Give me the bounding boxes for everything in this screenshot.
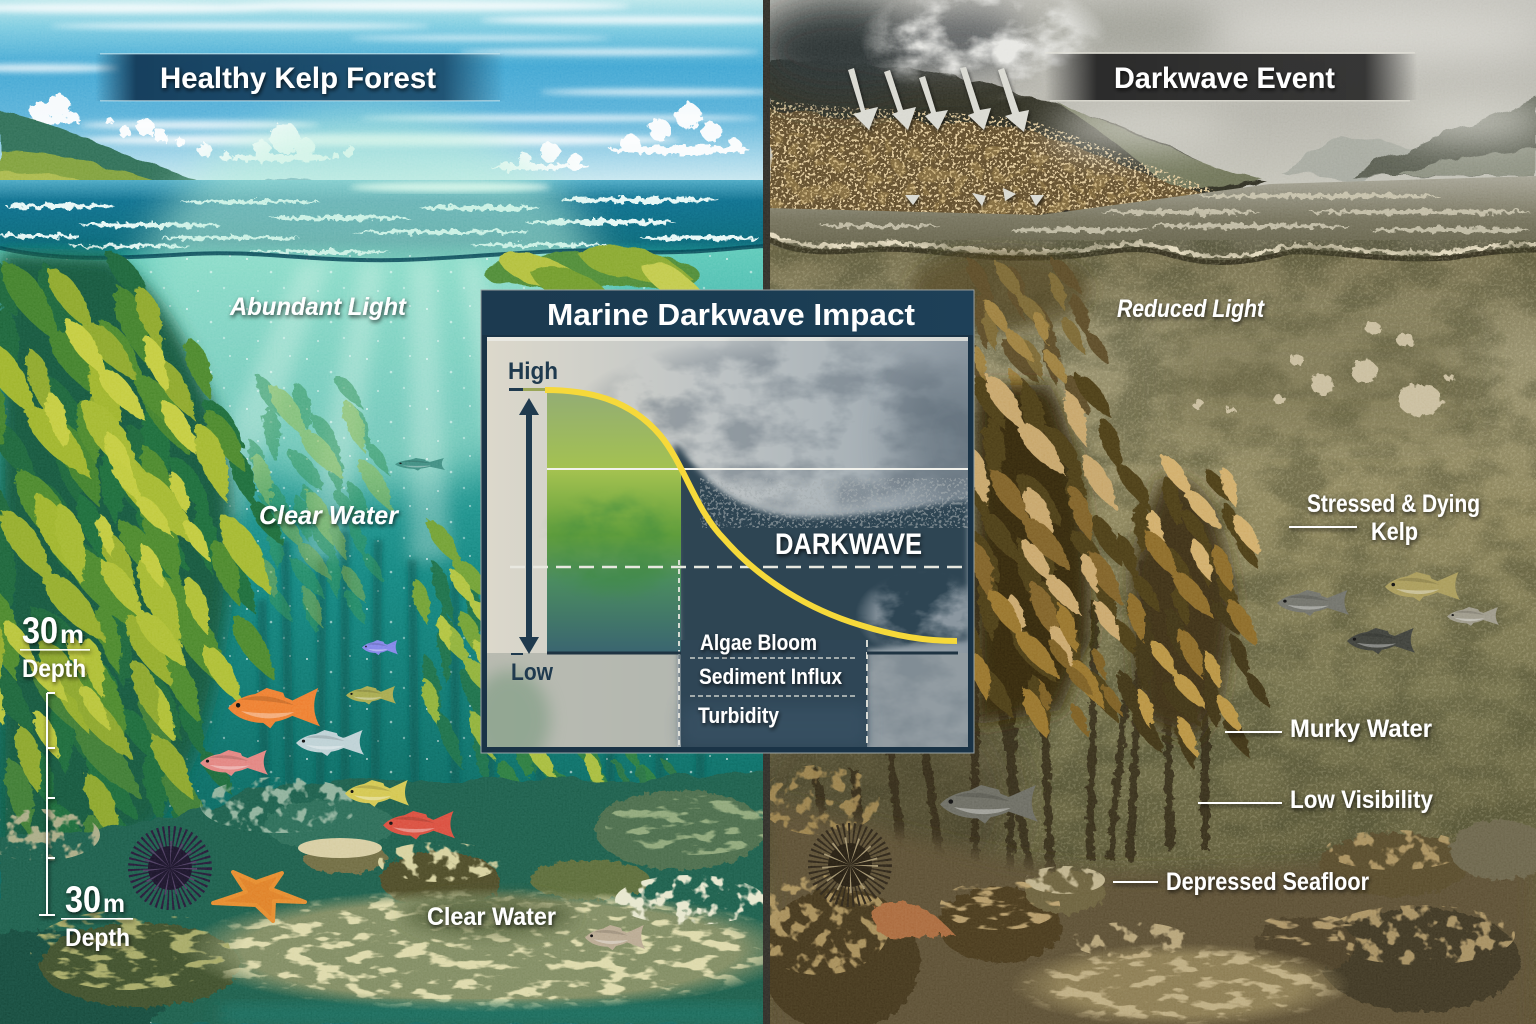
rock caps and cream seabed patches xyxy=(0,777,800,1012)
sky, darkwave side xyxy=(766,0,1536,190)
green healthy zone xyxy=(535,392,695,653)
depth label, bottom xyxy=(61,879,133,952)
factors list: Turbidity xyxy=(698,703,780,728)
sea surface, healthy side xyxy=(0,180,766,262)
labels on darkwave side xyxy=(1113,295,1480,896)
sea surface, darkwave side xyxy=(766,176,1536,262)
fish, darkwave side xyxy=(940,572,1499,824)
seafloor, darkwave side xyxy=(750,765,1536,1024)
depth scale xyxy=(20,610,133,952)
underwater body, darkwave side xyxy=(740,240,1536,1024)
panel: darkwave event scene xyxy=(740,0,1536,1024)
label: Murky Water: Murky Water xyxy=(1290,715,1432,743)
dark kelp stalks, darkwave side xyxy=(815,560,1205,880)
factors list: Algae Bloom xyxy=(700,630,817,655)
label: Stressed and Dying Kelp: Kelp xyxy=(1371,518,1418,546)
orange shell xyxy=(872,901,955,938)
label: Stressed and Dying Kelp: Stressed & Dying xyxy=(1307,490,1480,518)
impact curve xyxy=(545,390,957,641)
seafloor, healthy side xyxy=(0,770,800,1024)
DARKWAVE label: DARKWAVE xyxy=(775,528,922,561)
label: Abundant Light: Abundant Light xyxy=(229,293,408,321)
factors list xyxy=(698,630,843,728)
clouds, healthy side xyxy=(24,94,750,171)
panel: Marine Darkwave Impact chart xyxy=(470,290,1040,770)
large kelp forest, left xyxy=(0,239,284,838)
baseline xyxy=(547,652,958,654)
label: Stressed and Dying Kelp xyxy=(1289,490,1480,546)
depth label, top: m xyxy=(60,621,84,649)
heading: Darkwave Event xyxy=(1045,52,1417,102)
upper kelp canopy, darkwave side xyxy=(953,253,1115,429)
sky, healthy side xyxy=(0,0,800,190)
label: Clear Water upper: Clear Water xyxy=(259,500,400,530)
hills, healthy side xyxy=(0,110,311,180)
reference lines xyxy=(510,468,968,746)
labels on healthy side xyxy=(229,293,556,931)
heading: Healthy Kelp Forest xyxy=(95,53,505,102)
darkwave shaded area xyxy=(675,442,995,747)
panel: healthy kelp forest scene xyxy=(0,0,800,1024)
chart frame xyxy=(481,290,974,753)
sediment arrows falling xyxy=(848,67,1044,206)
label: Low Visibility: Low Visibility xyxy=(1290,786,1433,814)
depth label, top: Depth xyxy=(22,655,86,683)
depth label, bottom: Depth xyxy=(65,924,130,952)
storm clouds, darkwave side xyxy=(750,0,1536,146)
fish school, healthy side xyxy=(200,458,645,950)
depth label, top xyxy=(20,610,90,683)
depth ruler xyxy=(39,693,55,915)
background kelp stalks, healthy side xyxy=(262,520,704,810)
label: Reduced Light: Reduced Light xyxy=(1117,295,1265,323)
axis label Low: Low xyxy=(511,659,553,686)
heading: Healthy Kelp Forest: Healthy Kelp Forest xyxy=(160,62,436,95)
kelp canopy, top of right-center xyxy=(484,244,700,290)
chart title: Marine Darkwave Impact xyxy=(547,297,915,332)
divider between scenes xyxy=(763,0,770,1024)
chart title xyxy=(482,291,973,335)
sea urchin, darkwave side xyxy=(828,843,872,887)
depth label, top: 30 xyxy=(22,610,58,651)
depth label, bottom: m xyxy=(103,890,125,918)
label: Clear Water lower: Clear Water xyxy=(427,903,556,931)
factors list: Sediment Influx xyxy=(699,664,843,689)
depth label, bottom: 30 xyxy=(65,879,101,920)
sea urchin, healthy side xyxy=(148,846,192,890)
vertical high-low arrow xyxy=(509,388,545,655)
background kelp fronds, healthy side xyxy=(247,374,394,633)
axis label High: High xyxy=(508,358,558,385)
label: Depressed Seafloor: Depressed Seafloor xyxy=(1166,868,1369,896)
kelp, right of centre xyxy=(412,518,677,783)
stressed kelp, darkwave side xyxy=(952,368,1275,771)
chart plot background xyxy=(470,330,1040,770)
sediment-laden hillside xyxy=(770,60,1270,220)
heading: Darkwave Event: Darkwave Event xyxy=(1114,62,1335,95)
sediment stones drifting xyxy=(1170,320,1470,430)
underwater body, healthy side xyxy=(0,110,766,1024)
mountains, darkwave side xyxy=(1280,96,1536,180)
starfish xyxy=(213,872,305,921)
